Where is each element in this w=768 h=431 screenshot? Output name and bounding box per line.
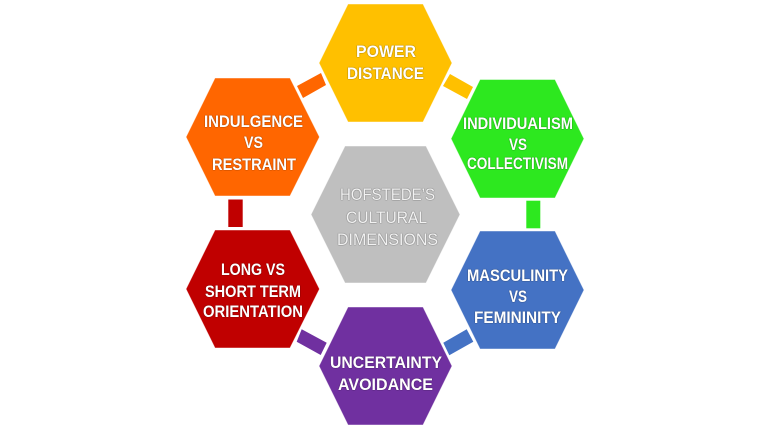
label: masculinity vs femininity: VS — [509, 287, 527, 306]
panel: individualism vs collectivism — [451, 80, 584, 198]
label: long vs short term orientation: ORIENTATION — [203, 302, 303, 321]
label: long vs short term orientation: SHORT TERM — [205, 282, 301, 301]
panel: power distance — [319, 4, 452, 122]
title: hofstede's cultural dimensions: DIMENSIONS — [337, 230, 438, 249]
panel: long vs short term orientation — [186, 230, 320, 348]
label: individualism vs collectivism: INDIVIDUALISM — [463, 114, 573, 133]
label: masculinity vs femininity: FEMININITY — [474, 308, 562, 327]
label: indulgence vs restraint: INDULGENCE — [204, 112, 303, 131]
panel: indulgence vs restraint — [186, 78, 320, 196]
panel: uncertainty avoidance — [319, 307, 452, 425]
title: hofstede's cultural dimensions: HOFSTEDE’S — [340, 185, 435, 204]
title: hofstede's cultural dimensions — [337, 185, 438, 249]
arrow: red connector — [228, 200, 243, 227]
label: uncertainty avoidance: UNCERTAINTY — [330, 353, 443, 372]
label: long vs short term orientation: LONG VS — [221, 260, 285, 279]
title: hofstede's cultural dimensions: CULTURAL — [346, 208, 427, 227]
panel: centre hexagon — [311, 146, 460, 283]
panel: masculinity vs femininity — [451, 231, 584, 349]
label: uncertainty avoidance — [330, 353, 443, 394]
label: individualism vs collectivism: COLLECTIVISM — [467, 154, 568, 173]
label: power distance: POWER — [356, 42, 416, 61]
label: uncertainty avoidance: AVOIDANCE — [338, 375, 433, 394]
arrow: green connector — [526, 201, 540, 228]
arrow: yellow connector — [443, 74, 473, 99]
label: masculinity vs femininity: MASCULINITY — [467, 266, 569, 285]
label: individualism vs collectivism: VS — [509, 135, 527, 154]
label: masculinity vs femininity — [467, 266, 569, 327]
arrow: blue connector — [443, 329, 473, 355]
label: indulgence vs restraint — [204, 112, 303, 174]
label: long vs short term orientation — [203, 260, 303, 321]
arrow: orange connector — [297, 73, 326, 98]
label: indulgence vs restraint: RESTRAINT — [212, 155, 297, 174]
arrow: purple connector — [297, 329, 327, 355]
label: power distance — [347, 42, 424, 83]
label: power distance: DISTANCE — [347, 64, 424, 83]
label: individualism vs collectivism — [463, 114, 573, 173]
label: indulgence vs restraint: VS — [244, 133, 263, 152]
